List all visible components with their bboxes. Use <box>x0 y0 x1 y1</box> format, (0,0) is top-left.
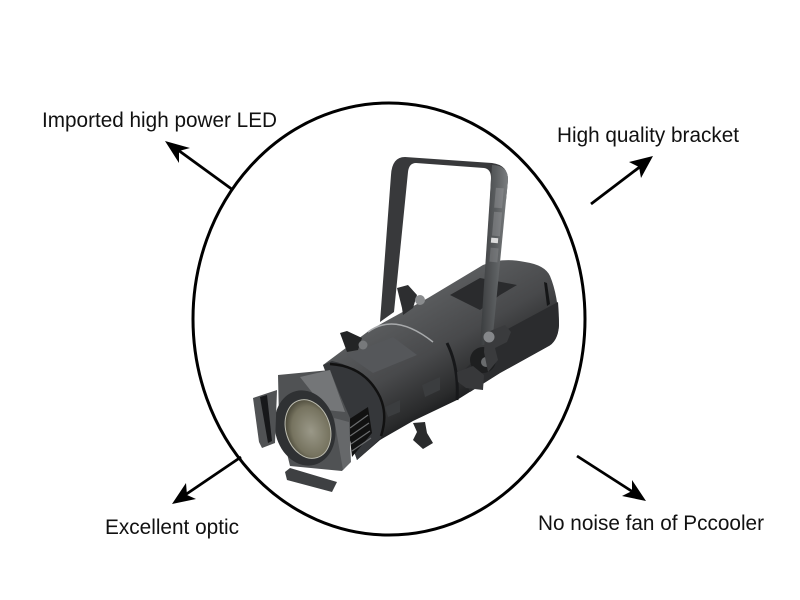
pivot center <box>481 357 491 367</box>
bracket front arm <box>480 165 508 345</box>
lens <box>267 384 343 472</box>
barrel highlight arc <box>368 324 433 342</box>
lamp body <box>323 260 559 460</box>
rear slot <box>544 282 550 306</box>
frame top facet <box>300 370 345 412</box>
label: bottom left: Excellent optic <box>105 516 239 539</box>
label: top right: High quality bracket <box>557 124 739 147</box>
collar ring <box>447 343 457 400</box>
front ring <box>323 361 384 460</box>
upper knob <box>397 285 417 315</box>
arrow: bottom right <box>577 456 646 501</box>
arrow: top right <box>591 156 653 204</box>
frame side facet <box>334 418 351 470</box>
front frame <box>278 370 350 471</box>
left barn door <box>253 390 277 448</box>
arrow: bottom left <box>172 457 241 504</box>
handle bolt <box>484 332 494 342</box>
arrow: top left <box>165 141 233 190</box>
top panel <box>347 337 417 373</box>
bracket label <box>489 188 504 262</box>
rear lower band <box>462 302 559 392</box>
label: bottom right: No noise fan of Pccooler <box>538 512 764 535</box>
lower knob <box>413 422 433 449</box>
vent grille <box>450 278 517 310</box>
left knob <box>340 331 362 352</box>
product: stage light <box>253 157 559 492</box>
upper bolt <box>415 295 425 305</box>
label: top left: Imported high power LED <box>42 109 277 132</box>
left bolt <box>358 340 368 350</box>
bottom barn door <box>285 468 337 492</box>
cooling fins <box>348 407 372 457</box>
bracket back arm and top band <box>380 157 508 322</box>
handle <box>484 325 511 372</box>
tabs <box>422 377 440 397</box>
bracket knob <box>457 366 484 390</box>
pivot plate <box>470 347 496 373</box>
main circle <box>193 103 585 535</box>
front ring edge <box>330 364 384 436</box>
